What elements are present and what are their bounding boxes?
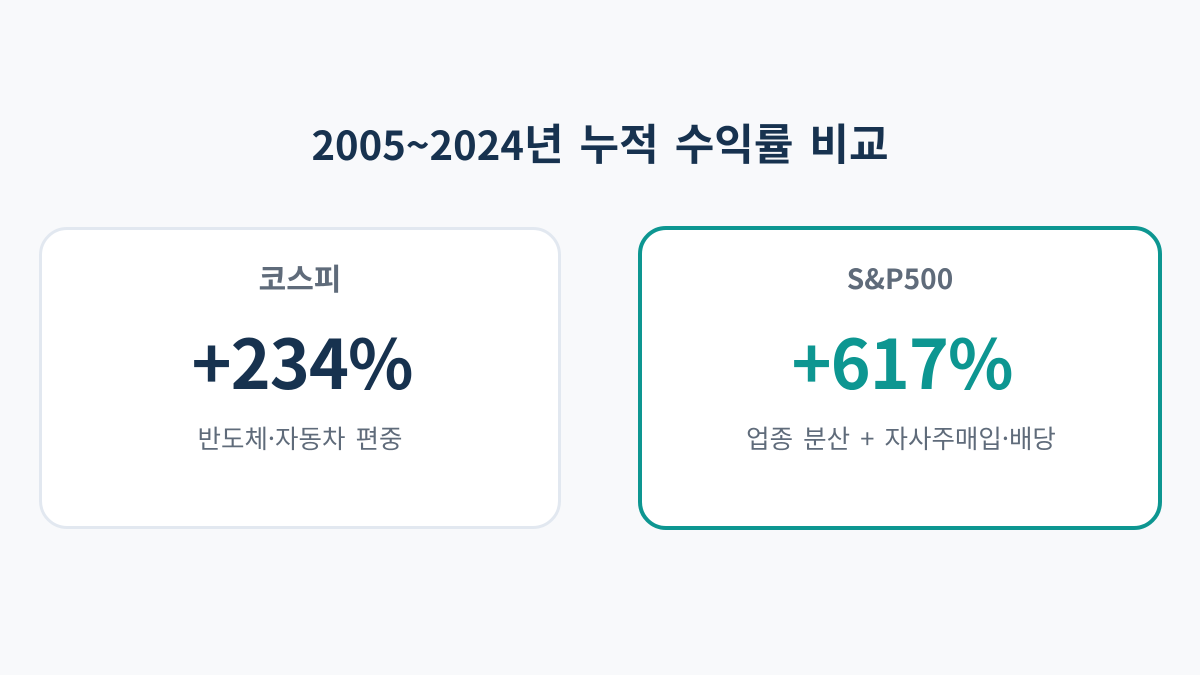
title: 2005~2024년 누적 수익률 비교 xyxy=(311,111,889,173)
note: KOSPI: 반도체·자동차 편중 xyxy=(198,419,402,456)
panel heading: S&P500: S&P500 xyxy=(847,258,953,298)
value: S&P500 return: +617% xyxy=(792,310,1012,409)
panel: KOSPI xyxy=(39,227,561,529)
panel: S&P500 xyxy=(638,226,1162,530)
value: KOSPI return: +234% xyxy=(192,310,412,409)
panel heading: KOSPI: 코스피 xyxy=(259,255,341,299)
note: S&P500: 업종 분산 + 자사주매입·배당 xyxy=(746,419,1056,456)
